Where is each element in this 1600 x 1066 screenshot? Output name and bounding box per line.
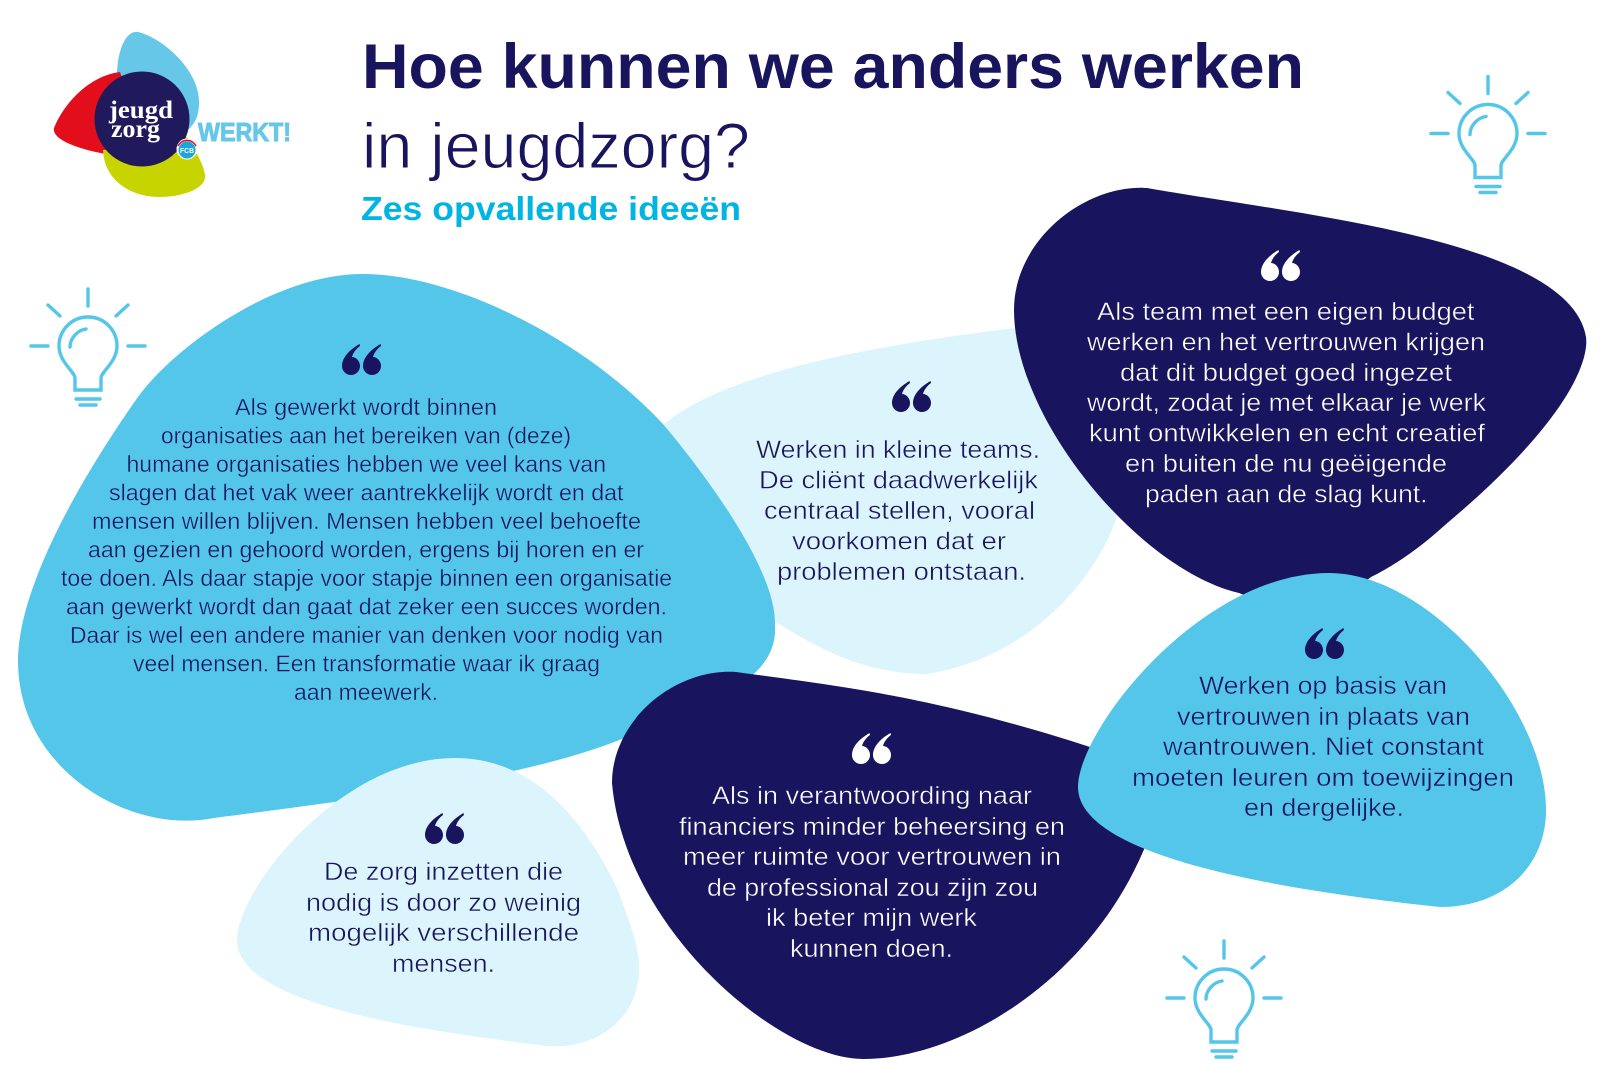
logo badge: FCB xyxy=(176,138,198,160)
quote text: De zorg inzetten die xyxy=(324,858,563,886)
quote text xyxy=(1086,298,1487,508)
title line 2: in jeugdzorg? xyxy=(362,110,750,182)
quote text: Daar is wel een andere manier van denken voor nodig van xyxy=(70,622,663,648)
quote text: De cliënt daadwerkelijk xyxy=(759,466,1039,494)
logo badge: FCB: FCB xyxy=(180,148,194,155)
quote text: aan meewerk. xyxy=(294,679,438,705)
logo petal: blue xyxy=(117,32,199,130)
quote text: toe doen. Als daar stapje voor stapje binnen een organisatie xyxy=(61,565,672,591)
logo wordmark: zorg xyxy=(111,116,161,143)
quote text: aan gezien en gehoord worden, ergens bij horen en er xyxy=(88,536,644,562)
panel: kleine teams quote xyxy=(664,328,1120,674)
quote text: kunnen doen. xyxy=(790,935,953,963)
panel: humane organisaties quote xyxy=(18,274,775,821)
quote text: aan gewerkt wordt dan gaat dat zeker een succes worden. xyxy=(66,594,667,620)
icon: light bulb left xyxy=(31,289,145,405)
quote text xyxy=(61,394,672,705)
quote text: dat dit budget goed ingezet xyxy=(1120,359,1452,387)
quote text: humane organisaties hebben we veel kans van xyxy=(126,451,606,477)
quote text: en buiten de nu geëigende xyxy=(1125,450,1447,478)
quote text: Werken op basis van xyxy=(1199,672,1447,700)
quote text: kunt ontwikkelen en echt creatief xyxy=(1089,420,1485,448)
logo petal: red xyxy=(54,72,130,155)
blob: navy bottom xyxy=(612,672,1145,1059)
quote text: mensen willen blijven. Mensen hebben veel behoefte xyxy=(92,508,641,534)
logo petal: lime xyxy=(103,137,205,197)
quote text: Werken in kleine teams. xyxy=(756,436,1040,464)
icon: quote mark xyxy=(1261,250,1300,281)
quote text: meer ruimte voor vertrouwen in xyxy=(683,843,1061,871)
quote text xyxy=(756,436,1040,586)
quote text: vertrouwen in plaats van xyxy=(1177,703,1470,731)
logo circle xyxy=(94,72,190,166)
blob: pale blue bottom left xyxy=(237,758,639,1046)
quote text: paden aan de slag kunt. xyxy=(1145,480,1428,508)
blob: cyan right xyxy=(1078,573,1546,907)
quote text: werken en het vertrouwen krijgen xyxy=(1086,328,1485,356)
quote text: centraal stellen, vooral xyxy=(764,497,1035,525)
panel: verantwoording quote xyxy=(612,672,1145,1059)
icon: quote mark xyxy=(892,381,931,412)
logo: jeugdzorg werkt xyxy=(54,32,291,197)
quote text: Als gewerkt wordt binnen xyxy=(235,394,497,420)
quote text: ik beter mijn werk xyxy=(766,904,978,932)
icon: light bulb top right xyxy=(1431,76,1545,192)
quote text: financiers minder beheersing en xyxy=(679,813,1065,841)
logo wordmark xyxy=(108,97,173,143)
panel: eigen budget quote xyxy=(1014,188,1586,604)
logo text: werkt: WERKT! xyxy=(198,117,291,147)
quote text: problemen ontstaan. xyxy=(777,558,1026,586)
quote text: Als team met een eigen budget xyxy=(1097,298,1475,326)
blob: pale blue xyxy=(664,328,1120,674)
quote text: wordt, zodat je met elkaar je werk xyxy=(1086,389,1487,417)
icon: light bulb bottom xyxy=(1167,941,1281,1057)
icon: quote mark xyxy=(852,733,891,764)
quote text: slagen dat het vak weer aantrekkelijk wordt en dat xyxy=(109,480,624,506)
blob: navy top right xyxy=(1014,188,1586,604)
quote text: wantrouwen. Niet constant xyxy=(1162,733,1484,761)
quote text xyxy=(679,782,1065,963)
icon: quote mark xyxy=(425,813,464,844)
quote text: mensen. xyxy=(392,950,495,978)
title xyxy=(362,32,1304,182)
title line 1: Hoe kunnen we anders werken xyxy=(362,32,1304,102)
blob: cyan large xyxy=(18,274,775,821)
subtitle: Zes opvallende ideeën xyxy=(361,190,741,227)
quote text xyxy=(306,858,581,978)
quote text: mogelijk verschillende xyxy=(308,919,579,947)
quote text: Als in verantwoording naar xyxy=(712,782,1032,810)
panel: vertrouwen quote xyxy=(1078,573,1546,907)
quote text: organisaties aan het bereiken van (deze) xyxy=(161,422,571,448)
quote text xyxy=(1132,672,1514,822)
quote text: nodig is door zo weinig xyxy=(306,889,581,917)
logo wordmark: jeugd xyxy=(108,97,173,124)
quote text: en dergelijke. xyxy=(1244,794,1404,822)
quote text: voorkomen dat er xyxy=(792,528,1006,556)
panel: zorg inzetten quote xyxy=(237,758,639,1046)
icon: quote mark xyxy=(342,344,381,375)
quote text: de professional zou zijn zou xyxy=(707,874,1038,902)
quote text: moeten leuren om toewijzingen xyxy=(1132,764,1514,792)
icon: quote mark xyxy=(1305,628,1344,659)
quote text: veel mensen. Een transformatie waar ik graag xyxy=(133,650,600,676)
